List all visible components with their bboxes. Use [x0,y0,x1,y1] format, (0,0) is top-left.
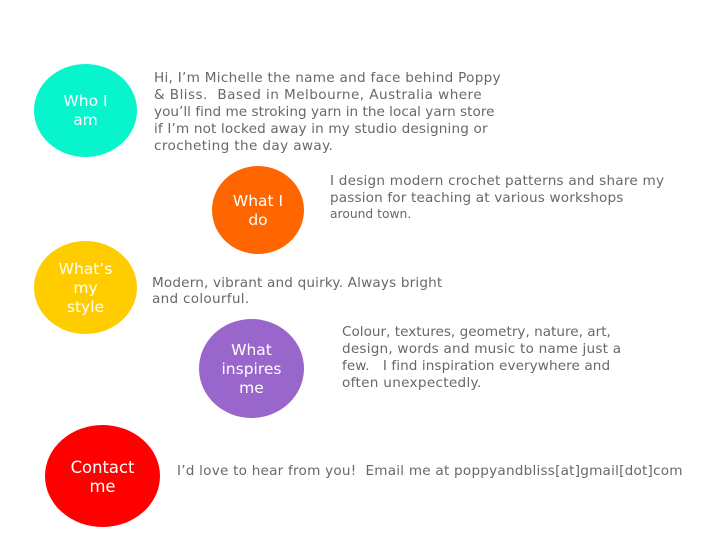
circle: What inspires me: inspires [222,360,282,378]
circle: What's my style [34,241,137,334]
circle: Contact me: me [89,477,116,496]
text: What I do: passion for teaching at various workshops [330,190,623,206]
circle: Contact me: Contact [71,458,134,477]
text: What I do: I design modern crochet patterns and share my [330,173,664,189]
text: What inspires me: Colour, textures, geometry, nature, art, [342,324,611,340]
text: Who I am [154,70,501,154]
text: Contact me: I’d love to hear from you! Email me at poppyandbliss[at]gmail[dot]com [177,463,683,479]
text: Who I am: & Bliss. Based in Melbourne, Australia where [154,87,482,103]
text: What's my style: Modern, vibrant and quirky. Always bright [152,275,442,291]
circle: What inspires me: What [231,341,272,359]
text: What inspires me: design, words and music to name just a [342,340,621,356]
circle: What's my style: style [67,298,104,316]
text: What inspires me [342,324,621,390]
circle: What inspires me [199,319,304,418]
text: What inspires me: often unexpectedly. [342,374,482,390]
text: What I do [330,173,664,221]
text: Who I am: you’ll find me stroking yarn in the local yarn store [154,104,495,120]
circle: What's my style: my [73,279,98,297]
text: Who I am: Hi, I’m Michelle the name and face behind Poppy [154,70,501,86]
text: What's my style: and colourful. [152,291,249,307]
text: What inspires me: few. I find inspiration everywhere and [342,358,610,374]
text: What's my style [152,275,442,307]
circle: Who I am: Who I [63,92,108,110]
circle: Who I am: am [73,110,98,128]
circle: Who I am [34,64,137,157]
circle: What I do [212,166,304,254]
circle: What I do: do [248,211,268,229]
circle: What inspires me: me [239,379,264,397]
circle: Contact me [45,425,160,527]
circle: What I do: What I [233,192,283,210]
text: What I do: around town. [330,207,411,221]
text: Who I am: crocheting the day away. [154,138,333,154]
text: Who I am: if I’m not locked away in my studio designing or [154,121,488,137]
circle: What's my style: What’s [59,260,112,278]
